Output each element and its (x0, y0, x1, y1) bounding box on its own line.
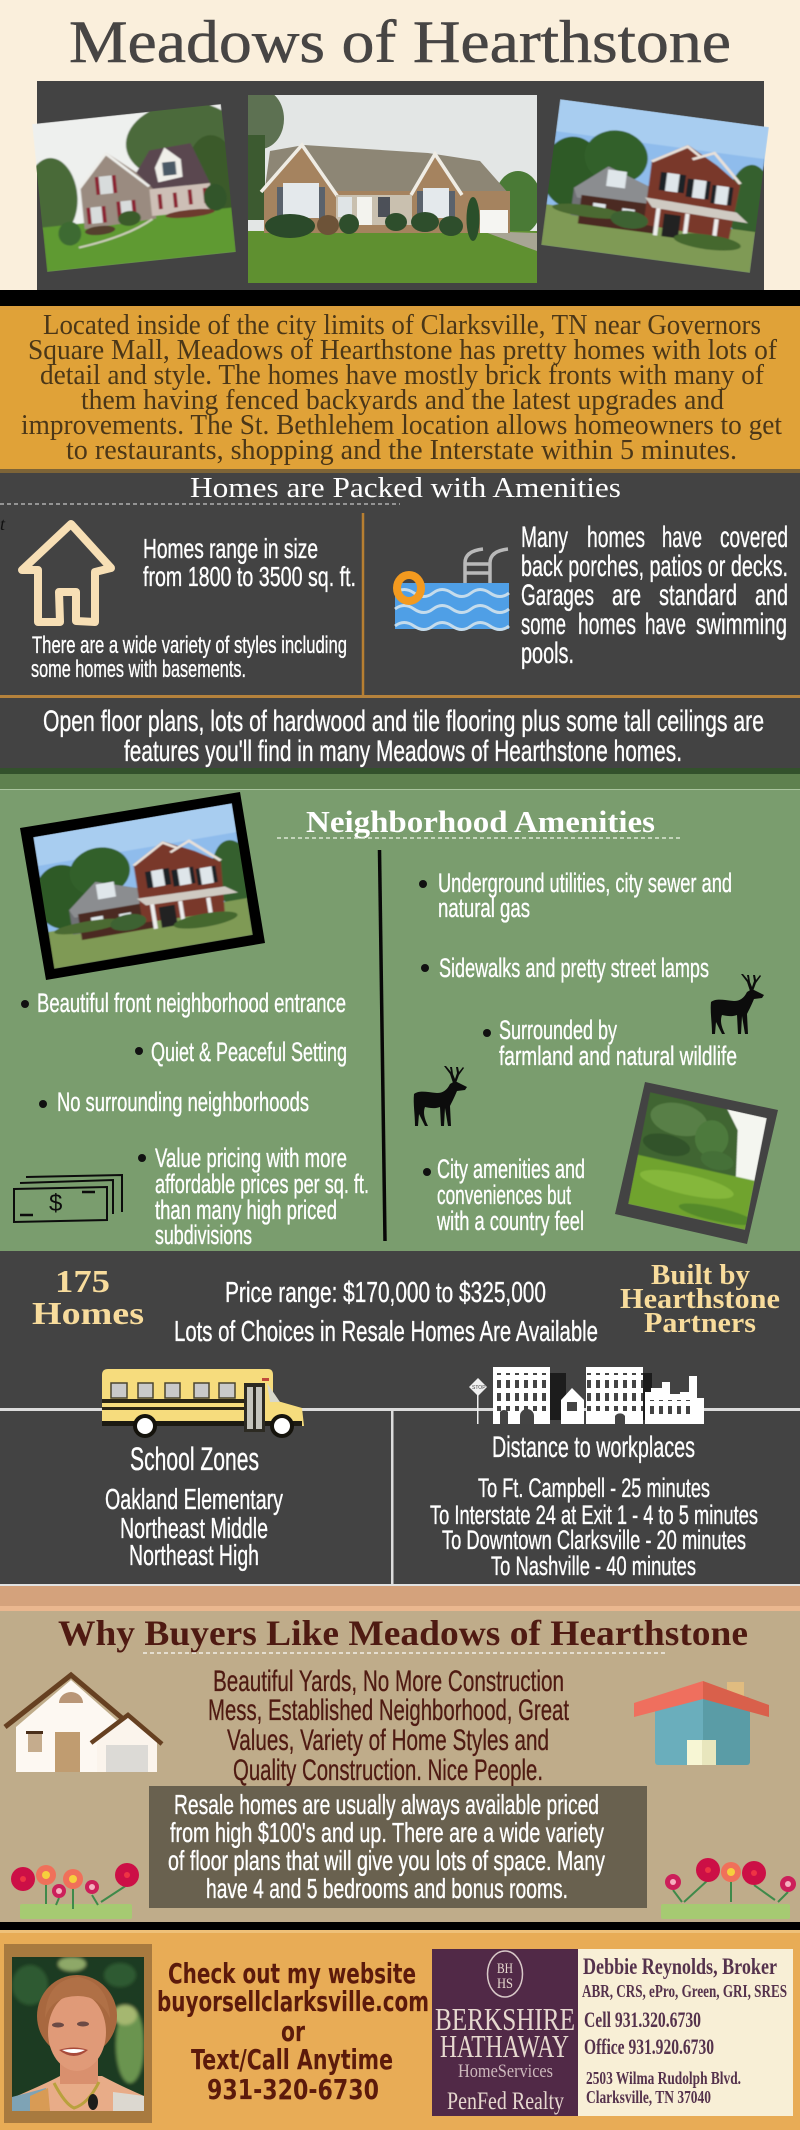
list: left amenities: Beautiful front neighborhood entrance (37, 988, 346, 1018)
text: porches and pools: some (521, 608, 566, 641)
text: porches and pools: homes (578, 608, 636, 641)
text: distance to workplaces: To Nashville - 40 minutes (491, 1551, 696, 1581)
photo: red brick house (533, 98, 779, 274)
text: reasons: Values, Variety of Home Styles and (227, 1724, 549, 1757)
heading: neighborhood amenities: Neighborhood Amenities (306, 804, 655, 839)
title: Meadows of Hearthstone (69, 9, 731, 75)
card: broker details: 2503 Wilma Rudolph Blvd. (586, 2068, 741, 2088)
text: porches and pools: are (612, 579, 641, 612)
icon: swimming pool (395, 549, 509, 630)
text: school zones: Oakland Elementary (105, 1484, 283, 1516)
text: home sizes: Homes range in size (143, 533, 318, 564)
icon: deer bottom left (414, 1066, 467, 1126)
list: left amenities: than many high priced (155, 1195, 337, 1225)
logo: Berkshire Hathaway: PenFed Realty (447, 2088, 564, 2115)
logo: Berkshire Hathaway: HS (497, 1976, 513, 1992)
photo: broker portrait (4, 1944, 152, 2123)
icon: house outline (22, 524, 111, 622)
list: right amenities (419, 868, 737, 1236)
text: website and phone: or (281, 2015, 305, 2048)
black band (0, 290, 800, 306)
text: school zones: Northeast High (129, 1540, 259, 1572)
text: distance to workplaces (430, 1431, 758, 1581)
logo: Berkshire Hathaway: HATHAWAY (440, 2028, 569, 2064)
panel: neighborhood amenities (0, 768, 800, 1251)
text: builder: Partners (644, 1308, 756, 1339)
panel: homes amenities (0, 469, 800, 769)
text: builder (620, 1260, 780, 1339)
photo: framed lawn (615, 1082, 778, 1244)
icon: flowers right (661, 1858, 796, 1919)
text: home styles: some homes with basements. (31, 656, 246, 683)
intro text: Square Mall, Meadows of Hearthstone has pretty homes with lots of (28, 335, 778, 366)
black band lower (0, 1922, 800, 1930)
photo: framed brick house (20, 792, 265, 980)
text: website and phone: Text/Call Anytime (191, 2043, 393, 2076)
text: home styles: There are a wide variety of styles including (32, 632, 347, 659)
intro text: Located inside of the city limits of Clarksville, TN near Governors (43, 310, 761, 341)
text: porches and pools: homes (587, 521, 645, 554)
text: porches and pools: Garages (521, 579, 594, 612)
logo: Berkshire Hathaway: BERKSHIRE (435, 2001, 575, 2037)
text: builder: Hearthstone (620, 1284, 780, 1315)
text: school zones: Northeast Middle (120, 1513, 268, 1545)
list: left amenities: subdivisions (155, 1220, 252, 1250)
stat: 175 homes (32, 1263, 144, 1331)
stat: 175 homes: Homes (32, 1295, 144, 1331)
text: distance to workplaces: Distance to workplaces (492, 1431, 695, 1464)
text: school zones (105, 1441, 283, 1572)
text: reasons: Mess, Established Neighborhood, Great (208, 1694, 569, 1727)
icon: deer top right (711, 974, 764, 1034)
text: porches and pools: pools. (521, 637, 574, 670)
photo: stone house (32, 104, 236, 272)
list: right amenities: conveniences but (437, 1180, 571, 1210)
icon: city skyline (469, 1367, 704, 1424)
text: price range: Lots of Choices in Resale Homes Are Available (174, 1316, 598, 1348)
heading: why buyers: Why Buyers Like Meadows of Hearthstone (58, 1613, 748, 1653)
text: website and phone (157, 1957, 429, 2106)
text: porches and pools (521, 521, 788, 670)
list: left amenities: No surrounding neighborhoods (57, 1087, 309, 1117)
list: left amenities: Value pricing with more (155, 1143, 347, 1173)
card: broker details: Office 931.920.6730 (584, 2034, 714, 2059)
icon: city skyline: STOP (472, 1385, 486, 1391)
text: home sizes: from 1800 to 3500 sq. ft. (143, 561, 356, 592)
text: porches and pools: have (662, 521, 702, 554)
panel: homes amenities: t (0, 514, 6, 534)
intro text: detail and style. The homes have mostly brick fronts with many of (40, 360, 765, 391)
icon: coloured house (634, 1681, 769, 1765)
panel: why buyers like (0, 1586, 800, 1922)
callout: resale homes: from high $100's and up. There are a wide variety (170, 1817, 604, 1848)
callout: resale homes: have 4 and 5 bedrooms and bonus rooms. (206, 1873, 568, 1904)
text: price range: Price range: $170,000 to $325,000 (225, 1277, 546, 1309)
text: reasons: Beautiful Yards, No More Construction (213, 1665, 564, 1698)
list: right amenities: Surrounded by (499, 1015, 617, 1045)
icon: school bus (102, 1369, 304, 1438)
logo: Berkshire Hathaway: HomeServices (458, 2061, 553, 2082)
header background (0, 0, 800, 290)
text: porches and pools: have (645, 608, 686, 641)
intro panel (0, 306, 800, 469)
intro text (21, 310, 782, 466)
photo: tan brick house (236, 89, 542, 283)
text: porches and pools: Many (521, 521, 568, 554)
text: reasons (208, 1665, 569, 1787)
list: left amenities: affordable prices per sq. ft. (155, 1169, 369, 1199)
text: floor plans (43, 705, 764, 768)
text: website and phone: Check out my website (168, 1957, 416, 1990)
list: left amenities (21, 988, 369, 1250)
icon: flowers left (11, 1863, 139, 1919)
icon: money: $ (49, 1190, 62, 1217)
text: website and phone: buyorsellclarksville.com (157, 1985, 429, 2018)
card: broker details: Clarksville, TN 37040 (586, 2087, 711, 2107)
card: broker details (578, 1949, 793, 2116)
list: right amenities: with a country feel (436, 1206, 584, 1236)
text: website and phone: 931-320-6730 (207, 2073, 379, 2106)
logo: Berkshire Hathaway: BH (497, 1961, 513, 1977)
card: broker details: Cell 931.320.6730 (584, 2007, 701, 2032)
icon: money (14, 1175, 122, 1222)
logo: Berkshire Hathaway (432, 1949, 578, 2116)
text: reasons: Quality Construction. Nice People. (233, 1754, 543, 1787)
intro text: improvements. The St. Bethlehem location allows homeowners to get (21, 410, 782, 441)
intro text: them having fenced backyards and the latest upgrades and (81, 385, 724, 416)
text: school zones: School Zones (130, 1441, 259, 1477)
callout: resale homes: Resale homes are usually always available priced (174, 1789, 599, 1820)
list: right amenities: natural gas (438, 893, 530, 923)
text: porches and pools: standard (659, 579, 737, 612)
icon: white house (5, 1675, 162, 1772)
panel: contact footer (0, 1930, 800, 2130)
text: home styles (31, 632, 347, 683)
stat: 175 homes: 175 (55, 1263, 110, 1299)
text: price range (174, 1277, 598, 1348)
list: right amenities: City amenities and (437, 1154, 585, 1184)
text: builder: Built by (651, 1260, 750, 1291)
heading: homes amenities: Homes are Packed with Amenities (190, 472, 621, 504)
panel: community facts (0, 1251, 800, 1586)
list: left amenities: Quiet & Peaceful Setting (151, 1037, 347, 1067)
callout: resale homes (149, 1786, 647, 1908)
text: home sizes (143, 533, 356, 592)
photo panel (20, 81, 779, 290)
intro text: to restaurants, shopping and the Interstate within 5 minutes. (66, 435, 737, 466)
callout: resale homes: of floor plans that will give you lots of space. Many (168, 1845, 605, 1876)
